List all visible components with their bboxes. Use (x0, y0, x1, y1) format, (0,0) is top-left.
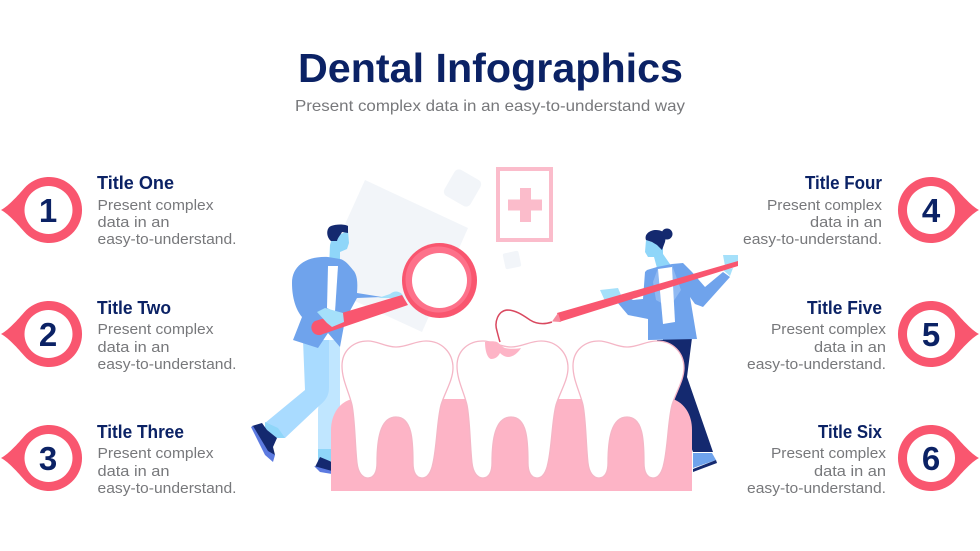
text block: title three: Title Three (97, 422, 184, 442)
text block: title four: Present complex (767, 197, 883, 214)
shirt (327, 266, 338, 312)
text block: title five: data in an (814, 339, 886, 356)
text block: title six: Title Six (818, 422, 882, 442)
illustration: background shapes (318, 168, 521, 332)
shoes (252, 423, 277, 455)
text block: title six: easy-to-understand. (747, 480, 886, 497)
far hand (378, 292, 404, 298)
text block: title three (97, 422, 236, 497)
text block: title five: Present complex (771, 321, 887, 338)
text block: title three: data in an (98, 463, 170, 480)
magnifier (311, 243, 477, 335)
text block: title four: data in an (810, 214, 882, 231)
text block: title four: easy-to-understand. (743, 231, 882, 248)
text block: title five (747, 298, 887, 373)
text block: title five: Title Five (807, 298, 882, 318)
marker 3: 3 (39, 440, 57, 477)
text block: title three: Present complex (98, 445, 214, 462)
back trouser leg (318, 340, 340, 455)
jacket and sleeves (617, 263, 730, 340)
text block: title four: Title Four (805, 173, 882, 193)
marker 5 (898, 301, 979, 367)
text block: title two: data in an (98, 339, 170, 356)
illustration: woman with dental probe (496, 228, 738, 472)
marker 1 (1, 177, 82, 243)
illustration: gums (331, 399, 692, 491)
text block: title five: easy-to-understand. (747, 356, 886, 373)
illustration: man with magnifier (251, 224, 477, 474)
head and neck (329, 231, 349, 268)
marker 5: 5 (922, 316, 940, 353)
marker 3 (1, 425, 82, 491)
text block: title one: data in an (98, 214, 170, 231)
subtitle: Present complex data in an easy-to-understand way (295, 98, 685, 115)
probe (496, 261, 738, 342)
marker 4 (898, 177, 979, 243)
text block: title three: easy-to-understand. (98, 480, 236, 497)
marker 2: 2 (39, 316, 57, 353)
trousers (657, 324, 713, 452)
marker 1: 1 (39, 192, 57, 229)
text block: title two (97, 298, 236, 373)
illustration: tooth 1 (342, 341, 453, 478)
hands (600, 288, 621, 301)
text block: title one (97, 173, 236, 248)
text block: title one: easy-to-understand. (98, 231, 236, 248)
front trouser leg (265, 340, 329, 438)
icon: medical cross sign (498, 169, 551, 240)
text block: title four (743, 173, 883, 248)
illustration: tooth 3 (573, 341, 684, 478)
illustration: tooth 2 with decay (457, 341, 568, 478)
shoe (693, 453, 716, 468)
marker 2 (1, 301, 82, 367)
jacket (292, 257, 382, 348)
text block: title two: Title Two (97, 298, 171, 318)
shirt (658, 267, 675, 324)
title: Dental Infographics (298, 45, 683, 91)
marker 6 (898, 425, 979, 491)
near hand (317, 308, 344, 327)
hair and bun (646, 230, 666, 250)
text block: title one: Present complex (98, 197, 214, 214)
marker 6: 6 (922, 440, 940, 477)
neck and head (645, 240, 672, 268)
hair (327, 224, 348, 241)
text block: title two: easy-to-understand. (98, 356, 236, 373)
text block: title one: Title One (97, 173, 174, 193)
text block: title six: Present complex (771, 445, 887, 462)
text block: title two: Present complex (98, 321, 214, 338)
lapels (653, 265, 681, 305)
marker 4: 4 (922, 192, 941, 229)
socks (265, 422, 285, 438)
text block: title six: data in an (814, 463, 886, 480)
text block: title six (747, 422, 887, 497)
